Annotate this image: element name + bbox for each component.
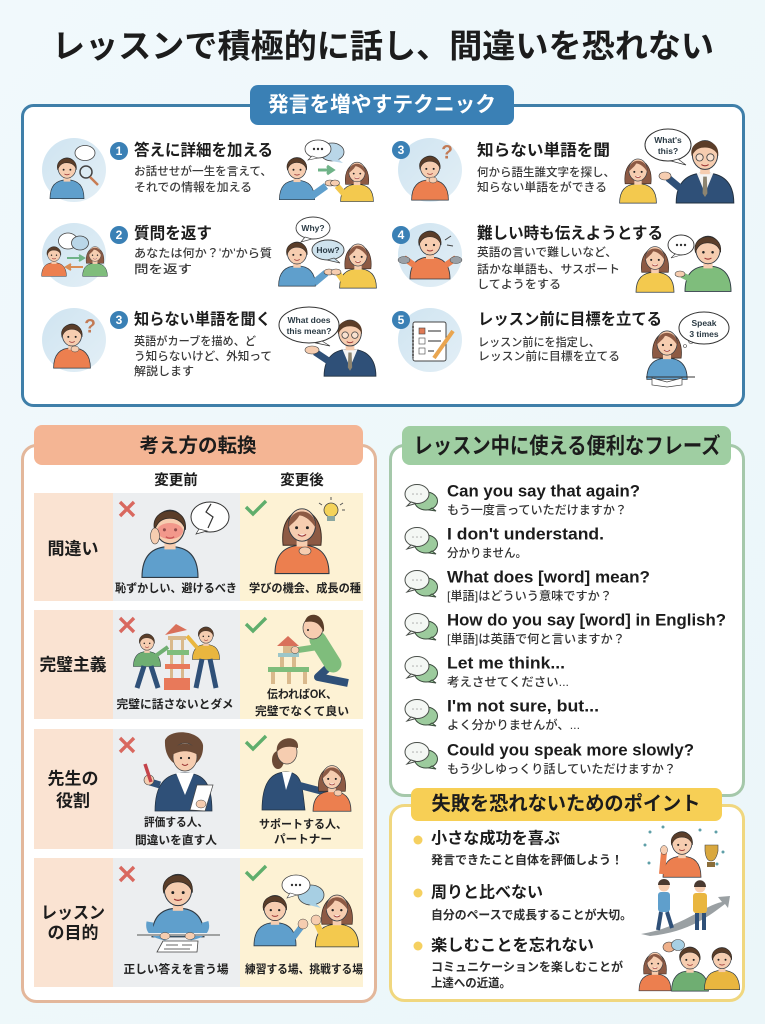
panel: mindset shift [22, 425, 376, 1002]
tip 3: コミュニケーションを楽しむことが [431, 959, 623, 974]
label: lesson purpose: の目的 [48, 924, 98, 942]
technique 2 text: 問を返す [134, 263, 192, 276]
panel heading: tips: 失敗を恐れないためのポイント [432, 793, 700, 815]
technique 3 text: 知らない単語を聞く [134, 310, 271, 328]
illustration: practising conversation [254, 875, 359, 947]
phrase 2: I don't understand. [447, 524, 604, 544]
illustration: embarrassed person [142, 502, 229, 577]
row: perfectionism [34, 610, 363, 719]
phrase 4: How do you say [word] in English? [447, 610, 726, 630]
illustration: teacher, What does this mean? [279, 307, 376, 376]
illustration: evaluating teacher [144, 732, 213, 811]
technique 4 text: してようをする [477, 278, 561, 291]
badge 3 right [392, 141, 410, 159]
icon: checklist and pencil [398, 308, 462, 372]
illustration: teacher, What does this mean?: this mean? [287, 326, 331, 336]
badge 4 [392, 226, 410, 244]
technique 2 text: あなたは何か？'か'から質 [134, 246, 272, 260]
illustration: planning, Speak 3 times: Speak [691, 318, 717, 328]
tip 1: 小さな成功を喜ぶ [431, 828, 560, 848]
technique 5 text: レッスン前にを指定し、 [478, 335, 600, 349]
caption: after [255, 687, 349, 718]
bubble: How?: How? [316, 245, 340, 255]
phrase 4: [単語]は英語で何と言いますか？ [447, 631, 625, 646]
icon: cross [120, 867, 134, 881]
badge 3: 3 [116, 313, 123, 327]
phrase 3: [単語]はどういう意味ですか？ [447, 588, 612, 603]
illustration: What's this? [620, 129, 734, 203]
technique 3 text: 英語がカーブを描め、ど [134, 334, 256, 348]
illustration: own path [641, 879, 730, 936]
row: mistakes [34, 493, 363, 601]
icon: person with question mark: ? [84, 316, 96, 338]
technique 5 text [478, 310, 662, 363]
caption: after: サポートする人、 [259, 818, 347, 831]
icon: check [246, 618, 266, 631]
icon: person with open hands [398, 223, 462, 287]
illustration: planning, Speak 3 times: 3 times [689, 329, 719, 339]
caption: before: 評価する人、 [144, 815, 208, 829]
panel: speaking techniques [22, 85, 744, 406]
caption: before [135, 815, 218, 847]
panel heading: phrases: レッスン中に使える便利なフレーズ [414, 434, 720, 458]
column header: after: 変更後 [280, 471, 324, 489]
badge 2: 2 [116, 228, 123, 242]
badge 5 [392, 311, 410, 329]
label: mistakes: 間違い [48, 538, 98, 558]
panel heading: mindset [34, 425, 363, 465]
illustration: adult helping build blocks [268, 615, 348, 684]
illustration: planning, Speak 3 times [646, 312, 729, 387]
phrase 5 [405, 654, 569, 689]
caption: after: 伝わればOK、 [267, 687, 337, 701]
label: teacher role: 先生の [48, 770, 98, 788]
phrase 1 [405, 482, 640, 517]
illustration: student writing [130, 874, 222, 952]
tip 2 [414, 884, 632, 922]
badge 1: 1 [116, 144, 123, 158]
technique 2 text [134, 224, 272, 276]
icon: cross [120, 738, 134, 752]
badge 1 [110, 142, 128, 160]
illustration: enjoying communication [639, 940, 740, 991]
phrase 7 [405, 740, 694, 776]
icon: thinking person: ? [441, 142, 453, 164]
phrase 1: Can you say that again? [447, 482, 640, 500]
technique 4 text [477, 224, 663, 291]
panel heading: tips [411, 788, 722, 821]
caption: before: 間違いを直す人 [135, 833, 218, 847]
icon: thinking person [398, 138, 462, 202]
panel heading: phrases [402, 426, 731, 465]
panel heading: techniques: 発言を増やすテクニック [268, 94, 496, 116]
badge 4: 4 [398, 228, 405, 242]
technique 3 right text: 知らない単語を聞 [477, 140, 610, 160]
technique 1 text: それでの情報を加える [134, 180, 252, 194]
phrase 4 [405, 610, 726, 646]
phrase 7: もう少しゆっくり話していただけますか？ [447, 761, 676, 776]
badge 5: 5 [398, 313, 405, 327]
icon: cross [120, 502, 134, 516]
technique 3 right text: 知らない単語をができる [477, 180, 607, 194]
label: lesson purpose: レッスン [41, 904, 105, 922]
phrase 3 [405, 568, 650, 603]
bubble: Why?: Why? [301, 223, 325, 233]
tip 3: 上達への近道。 [431, 975, 511, 990]
technique 3 right text [477, 140, 615, 194]
illustration: What's this?: What's [654, 135, 682, 145]
technique 1 text: 答えに詳細を加える [134, 140, 273, 160]
phrase 1: もう一度言っていただけますか？ [447, 502, 627, 517]
caption: after: 完璧でなくて良い [255, 704, 349, 718]
icon: exchanging questions [42, 223, 107, 287]
tip 3: 楽しむことを忘れない [431, 936, 594, 954]
technique 5 text: レッスン前に目標を立てる [478, 310, 662, 328]
badge 3 [110, 311, 128, 329]
icon: check [246, 736, 266, 749]
caption: before: 正しい答えを言う場 [124, 962, 229, 976]
phrase 5: Let me think... [447, 654, 565, 672]
icon: person with question mark [42, 308, 106, 372]
column header: before: 変更前 [154, 471, 198, 489]
illustration: two people talking, arrow [279, 140, 373, 202]
panel: useful phrases [390, 426, 744, 796]
caption: after: 練習する場、挑戦する場 [245, 962, 363, 976]
technique 4 text: 難しい時も伝えようとする [477, 224, 663, 242]
technique 1 text: お話せせが一生を言えて、 [134, 164, 272, 178]
panel heading: mindset: 考え方の転換 [140, 434, 256, 457]
label: lesson purpose [41, 904, 105, 942]
icon: person with magnifier [42, 138, 106, 202]
illustration: person with idea [275, 497, 345, 574]
technique 3 right text: 何から語生誰文字を探し、 [477, 165, 615, 179]
phrase 6: よく分かりませんが、... [447, 717, 580, 732]
label: teacher role: 役割 [56, 792, 90, 810]
technique 2 text: 質問を返す [134, 224, 212, 242]
technique 3 text: う知らないけど、外知って [134, 349, 272, 363]
badge 3 right: 3 [398, 143, 405, 157]
icon: check [246, 501, 266, 514]
technique 3 text [134, 310, 272, 378]
caption: before: 恥ずかしい、避けるべき [115, 581, 237, 595]
phrase 7: Could you speak more slowly? [447, 740, 694, 760]
label: perfectionism: 完璧主義 [40, 654, 106, 674]
tip 2: 自分のペースで成長することが大切。 [431, 907, 632, 922]
icon: check [246, 866, 266, 879]
technique 4 text: 英語の言いで難しいなど、 [477, 245, 617, 259]
badge 2 [110, 226, 128, 244]
illustration: What's this?: this? [658, 146, 678, 156]
title: レッスンで積極的に話し、間違いを恐れない [52, 28, 714, 64]
tip 3 [414, 936, 623, 990]
phrase 6: I'm not sure, but... [447, 696, 599, 716]
phrase 2: 分かりません。 [447, 546, 527, 560]
caption: after: 学びの機会、成長の種 [249, 581, 361, 595]
illustration: teacher, What does this mean?: What does [288, 315, 331, 325]
caption: before: 完璧に話さないとダメ [116, 697, 234, 711]
illustration: talking with support [636, 235, 731, 292]
icon: cross [120, 618, 134, 632]
tip 2: 周りと比べない [431, 884, 543, 902]
panel: tips for not fearing failure [390, 788, 744, 1000]
phrase 2 [405, 524, 604, 560]
panel heading: techniques [250, 85, 514, 125]
label: teacher role [48, 770, 98, 810]
tip 1 [414, 828, 623, 867]
illustration: supporting teacher and child [262, 738, 351, 811]
caption: after: パートナー [274, 833, 332, 846]
caption: after [259, 818, 347, 846]
illustration: celebrating with trophy [644, 826, 724, 877]
phrase 3: What does [word] mean? [447, 568, 650, 586]
row: lesson purpose [34, 858, 363, 987]
phrase 6 [405, 696, 599, 732]
row: teacher role [34, 729, 363, 849]
illustration: Why and How bubbles [279, 217, 376, 288]
phrase 5: 考えさせてください... [447, 675, 569, 689]
tip 1: 発言できたこと自体を評価しよう！ [431, 852, 623, 867]
technique 4 text: 話かな単語も、サスポート [477, 262, 620, 276]
technique 3 text: 解説します [134, 364, 194, 378]
illustration: children with block tower [133, 624, 220, 690]
technique 5 text: レッスン前に目標を立てる [478, 349, 620, 363]
technique 1 text [134, 140, 273, 194]
